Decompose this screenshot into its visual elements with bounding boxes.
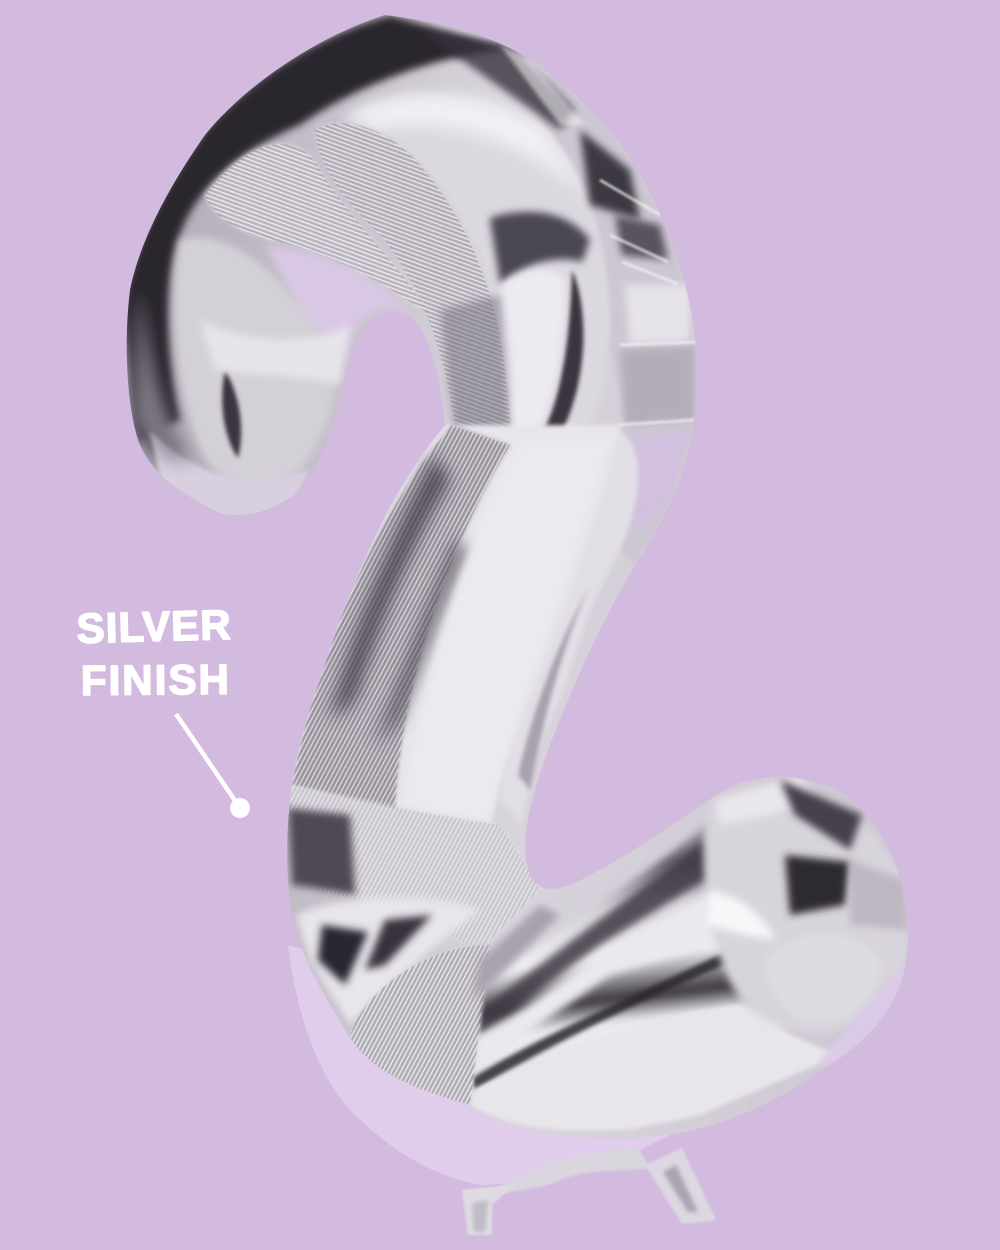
callout pointer line with dot xyxy=(176,714,250,818)
top arc body xyxy=(122,15,510,440)
callout label: Silver Finish: FINISH xyxy=(81,656,229,704)
diagonal stem xyxy=(288,425,620,830)
foot ribbed junction xyxy=(350,905,560,1105)
right ball xyxy=(704,775,908,1075)
foot xyxy=(470,815,840,1131)
right pleated edge xyxy=(420,30,698,565)
balloon: silver number 2 xyxy=(126,15,908,1138)
top arc ribbed fold xyxy=(315,123,510,435)
lower band xyxy=(286,785,540,950)
callout label: Silver Finish xyxy=(76,601,231,704)
balloon: lilac translucent lower panel and neck tabs xyxy=(288,945,716,1235)
callout label: Silver Finish: SILVER xyxy=(76,601,231,652)
ribbon beside stem xyxy=(500,430,638,825)
left hook xyxy=(205,144,430,315)
